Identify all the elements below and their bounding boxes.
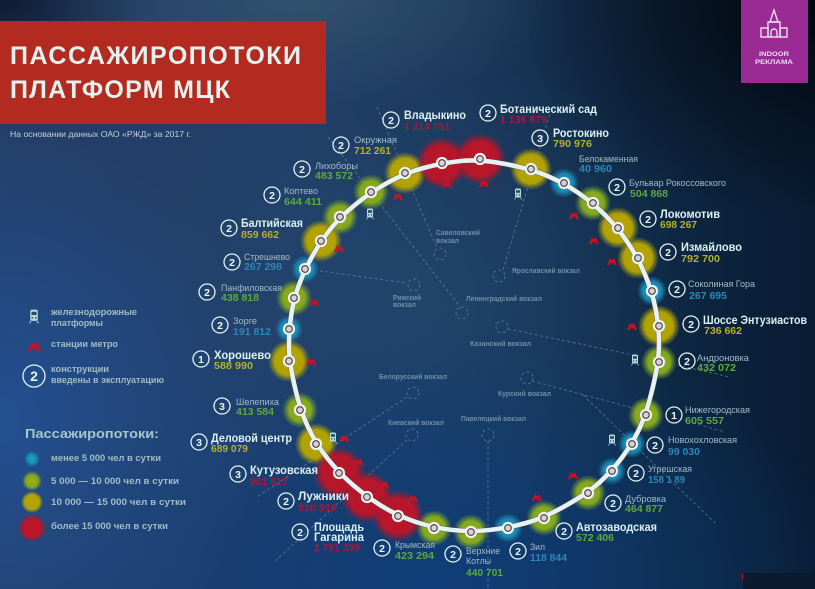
label: Владыкино: Владыкино xyxy=(404,110,466,122)
logo: indoor advertising: РЕКЛАМА xyxy=(755,59,793,66)
label: Окружная: 712 261 xyxy=(354,145,391,157)
legend: constructions commissioned: 2 xyxy=(30,368,38,384)
label: Новохохловская: 2 xyxy=(652,440,658,452)
label: Угрешская: 2 xyxy=(633,468,639,480)
label: Угрешская xyxy=(628,464,692,486)
label: Верхние Котлы: 2 xyxy=(450,549,456,561)
label: Локомотив: Локомотив xyxy=(660,209,720,221)
label: Ботанический сад: Ботанический сад xyxy=(500,104,598,116)
label: Владыкино: 1 214 751 xyxy=(404,121,450,133)
label: Лихоборы: 483 572 xyxy=(315,170,353,182)
legend: constructions commissioned: конструкции xyxy=(51,364,109,375)
label: Нижегородская: Нижегородская xyxy=(685,405,750,416)
label: Зил xyxy=(510,542,567,564)
ring line xyxy=(289,160,659,531)
label: Угрешская: Угрешская xyxy=(648,464,692,475)
label: Дубровка: 2 xyxy=(610,498,616,510)
railway terminal labels: Савеловский xyxy=(436,228,480,237)
subtitle: На основании данных ОАО «РЖД» за 2017 г. xyxy=(10,129,191,139)
station connection dashed lines xyxy=(257,107,730,589)
railway terminal labels: Белорусский вокзал xyxy=(379,372,447,381)
bottom right corner patch xyxy=(742,573,815,589)
label: Зил: 2 xyxy=(515,546,521,558)
railway terminal labels xyxy=(379,228,580,427)
legend: flow 10000 to 15000: 10 000 — 15 000 чел в сутки xyxy=(51,497,186,508)
label: Белокаменная: 40 960 xyxy=(579,163,612,175)
glows: 5000 to 10000 per day xyxy=(276,174,677,550)
label: Дубровка: Дубровка xyxy=(625,494,667,505)
label: Соколиная Гора xyxy=(669,279,756,302)
label: Шоссе Энтузиастов: Шоссе Энтузиастов xyxy=(703,315,807,327)
label: Хорошево xyxy=(193,350,271,372)
label: Зорге xyxy=(212,316,271,338)
title banner: ПЛАТФОРМ МЦК xyxy=(10,76,231,104)
label: Локомотив: 698 267 xyxy=(660,219,697,231)
label: Площадь Гагарина: Гагарина xyxy=(314,532,365,544)
title banner: ПАССАЖИРОПОТОКИ xyxy=(10,42,301,70)
legend: flow 5000 to 10000: 5 000 — 10 000 чел в сутки xyxy=(51,476,179,487)
label: Панфиловская: 438 818 xyxy=(221,292,259,304)
glows: under 5000 per day xyxy=(275,168,667,543)
label: Зил: 118 844 xyxy=(530,552,567,564)
label: Деловой центр: 689 079 xyxy=(211,443,248,455)
label: Измайлово: 2 xyxy=(665,247,671,259)
label: Андроновка: Андроновка xyxy=(697,353,750,364)
label: Белокаменная xyxy=(579,154,638,175)
legend: metro stations: станции метро xyxy=(51,339,118,350)
railway platform icons xyxy=(330,188,638,446)
label: Площадь Гагарина: Площадь xyxy=(314,522,364,534)
label: Верхние Котлы xyxy=(445,546,503,579)
label: Коптево: 644 411 xyxy=(284,196,322,208)
legend heading: Пассажиропотоки: xyxy=(25,426,159,441)
railway terminal labels: вокзал xyxy=(393,300,416,309)
title banner xyxy=(0,21,326,124)
label: Нижегородская xyxy=(666,405,750,427)
logo: indoor advertising: INDOOR xyxy=(759,51,789,58)
label: Угрешская: 158 1 89 xyxy=(648,474,685,486)
label: Крымская: Крымская xyxy=(395,540,435,551)
label: Верхние Котлы: 440 701 xyxy=(466,567,503,579)
railway terminal labels: Ярославский вокзал xyxy=(512,266,580,275)
label: Кутузовская: Кутузовская xyxy=(250,465,318,477)
label: Хорошево: 588 990 xyxy=(214,360,253,372)
legend: constructions commissioned: введены в эксплуатацию xyxy=(51,375,164,386)
label: Шоссе Энтузиастов: 2 xyxy=(688,319,694,331)
label: Зил: Зил xyxy=(530,542,545,553)
label: Площадь Гагарина xyxy=(292,522,365,554)
label: Ботанический сад xyxy=(480,104,598,126)
label: Верхние Котлы: Верхние xyxy=(466,546,500,557)
label: Хорошево: 1 xyxy=(198,354,204,366)
label: Дубровка xyxy=(605,494,667,515)
label: Стрешнево: 267 298 xyxy=(244,261,282,273)
label: Площадь Гагарина: 1 791 398 xyxy=(314,542,360,554)
label: Кутузовская: 961 617 xyxy=(250,476,288,488)
glows: over 15000 per day xyxy=(313,133,506,542)
label: Окружная xyxy=(333,135,397,157)
label: Стрешнево: Стрешнево xyxy=(244,252,290,263)
legend: railway platforms xyxy=(30,307,137,329)
label: Бульвар Рокоссовского: 2 xyxy=(614,182,620,194)
label: Измайлово xyxy=(660,242,742,265)
legend: constructions commissioned xyxy=(23,364,164,387)
legend: flow over 15000 xyxy=(18,514,168,542)
label: Бульвар Рокоссовского xyxy=(609,178,726,200)
label: Стрешнево: 2 xyxy=(229,257,235,269)
label: Андроновка xyxy=(679,353,750,374)
label: Автозаводская: 2 xyxy=(561,526,567,538)
glows: 10000 to 15000 per day xyxy=(268,148,680,465)
label: Лихоборы: 2 xyxy=(299,164,305,176)
label: Ростокино xyxy=(532,128,609,150)
label: Шоссе Энтузиастов xyxy=(683,315,807,337)
label: Нижегородская: 605 557 xyxy=(685,415,724,427)
railway terminal labels: Курский вокзал xyxy=(498,389,551,398)
railway terminal labels: Киевский вокзал xyxy=(388,418,444,427)
label: Хорошево: Хорошево xyxy=(214,350,271,362)
railway terminal labels: Павелецкий вокзал xyxy=(461,414,526,423)
label: Владыкино: 2 xyxy=(388,115,394,127)
railway terminal labels: вокзал xyxy=(436,236,459,245)
label: Панфиловская: 2 xyxy=(204,287,210,299)
metro station icons xyxy=(306,180,637,502)
railway terminal labels: Рижский xyxy=(393,293,421,302)
label: Зорге: 191 812 xyxy=(233,326,271,338)
label: Балтийская xyxy=(221,218,303,241)
label: Локомотив: 2 xyxy=(645,214,651,226)
label: Соколиная Гора: 2 xyxy=(674,284,680,296)
label: Бульвар Рокоссовского: Бульвар Рокоссовского xyxy=(629,178,726,189)
label: Шоссе Энтузиастов: 736 662 xyxy=(704,325,742,337)
label: Деловой центр: Деловой центр xyxy=(211,433,292,445)
label: Автозаводская xyxy=(556,522,657,544)
station markers xyxy=(283,153,665,538)
railway terminal labels: Ленинградский вокзал xyxy=(466,294,542,303)
label: Коптево xyxy=(264,186,322,208)
label: Деловой центр: 3 xyxy=(196,437,202,449)
label: Лужники: Лужники xyxy=(298,491,349,503)
label: Автозаводская: 572 406 xyxy=(576,532,614,544)
label: Крымская xyxy=(374,540,435,562)
legend: flow under 5000: менее 5 000 чел в сутки xyxy=(51,453,161,464)
label: Андроновка: 432 072 xyxy=(697,362,736,374)
label: Зорге: Зорге xyxy=(233,316,257,327)
label: Панфиловская xyxy=(199,283,282,304)
label: Ботанический сад: 1 136 879 xyxy=(500,114,547,126)
label: Шелепиха: 413 584 xyxy=(236,406,274,418)
label: Окружная: Окружная xyxy=(354,135,397,146)
label: Крымская: 423 294 xyxy=(395,550,434,562)
label: Шелепиха: Шелепиха xyxy=(236,397,280,408)
railway terminal labels: Казанский вокзал xyxy=(470,339,531,348)
label: Локомотив xyxy=(640,209,720,231)
label: Ботанический сад: 2 xyxy=(485,108,491,120)
label: Шелепиха: 3 xyxy=(219,401,225,413)
label: Андроновка: 2 xyxy=(684,356,690,368)
label: Лихоборы xyxy=(294,161,358,182)
legend: railway platforms: платформы xyxy=(51,318,103,329)
label: Верхние Котлы: Котлы xyxy=(466,556,491,567)
label: Нижегородская: 1 xyxy=(671,410,677,422)
label: Измайлово: Измайлово xyxy=(681,242,742,254)
label: Лужники xyxy=(278,491,349,514)
label: Автозаводская: Автозаводская xyxy=(576,522,657,534)
label: Дубровка: 464 877 xyxy=(625,503,663,515)
label: Коптево: 2 xyxy=(269,190,275,202)
label: Белокаменная: Белокаменная xyxy=(579,154,638,165)
logo: indoor advertising xyxy=(741,0,808,83)
label: Соколиная Гора: 267 695 xyxy=(689,290,727,302)
legend: flow under 5000 xyxy=(24,451,161,467)
label: Балтийская: 859 662 xyxy=(241,229,279,241)
label: Соколиная Гора: Соколиная Гора xyxy=(688,279,756,290)
label: Ростокино: Ростокино xyxy=(553,128,609,140)
label: Панфиловская: Панфиловская xyxy=(221,283,282,294)
label: Кутузовская xyxy=(230,465,318,488)
label: Измайлово: 792 700 xyxy=(681,253,720,265)
label: Балтийская: Балтийская xyxy=(241,218,303,230)
legend: railway platforms: железнодорожные xyxy=(50,307,137,318)
label: Лужники: 810 919 xyxy=(298,502,337,514)
label: Ростокино: 3 xyxy=(537,133,543,145)
label: Ростокино: 790 976 xyxy=(553,138,592,150)
label: Балтийская: 2 xyxy=(226,223,232,235)
label: Окружная: 2 xyxy=(338,140,344,152)
label: Лихоборы: Лихоборы xyxy=(315,161,358,172)
label: Коптево: Коптево xyxy=(284,186,318,197)
label: Стрешнево xyxy=(224,252,290,273)
label: Шелепиха xyxy=(214,397,280,418)
label: Зорге: 2 xyxy=(217,320,223,332)
legend: flow 10000 to 15000 xyxy=(21,491,186,513)
label: Новохохловская: 99 030 xyxy=(668,446,700,458)
label: Лужники: 2 xyxy=(283,496,289,508)
label: Кутузовская: 3 xyxy=(235,469,241,481)
label: Крымская: 2 xyxy=(379,543,385,555)
label: Деловой центр xyxy=(191,433,292,455)
label: Бульвар Рокоссовского: 504 868 xyxy=(630,188,668,200)
label: Площадь Гагарина: 2 xyxy=(297,527,303,539)
label: Новохохловская: Новохохловская xyxy=(668,435,737,446)
label: Владыкино xyxy=(383,110,466,133)
legend: flow over 15000: более 15 000 чел в сутки xyxy=(51,521,168,532)
label: Новохохловская xyxy=(647,435,737,458)
legend: metro stations xyxy=(28,339,118,351)
legend: flow 5000 to 10000 xyxy=(22,471,179,491)
